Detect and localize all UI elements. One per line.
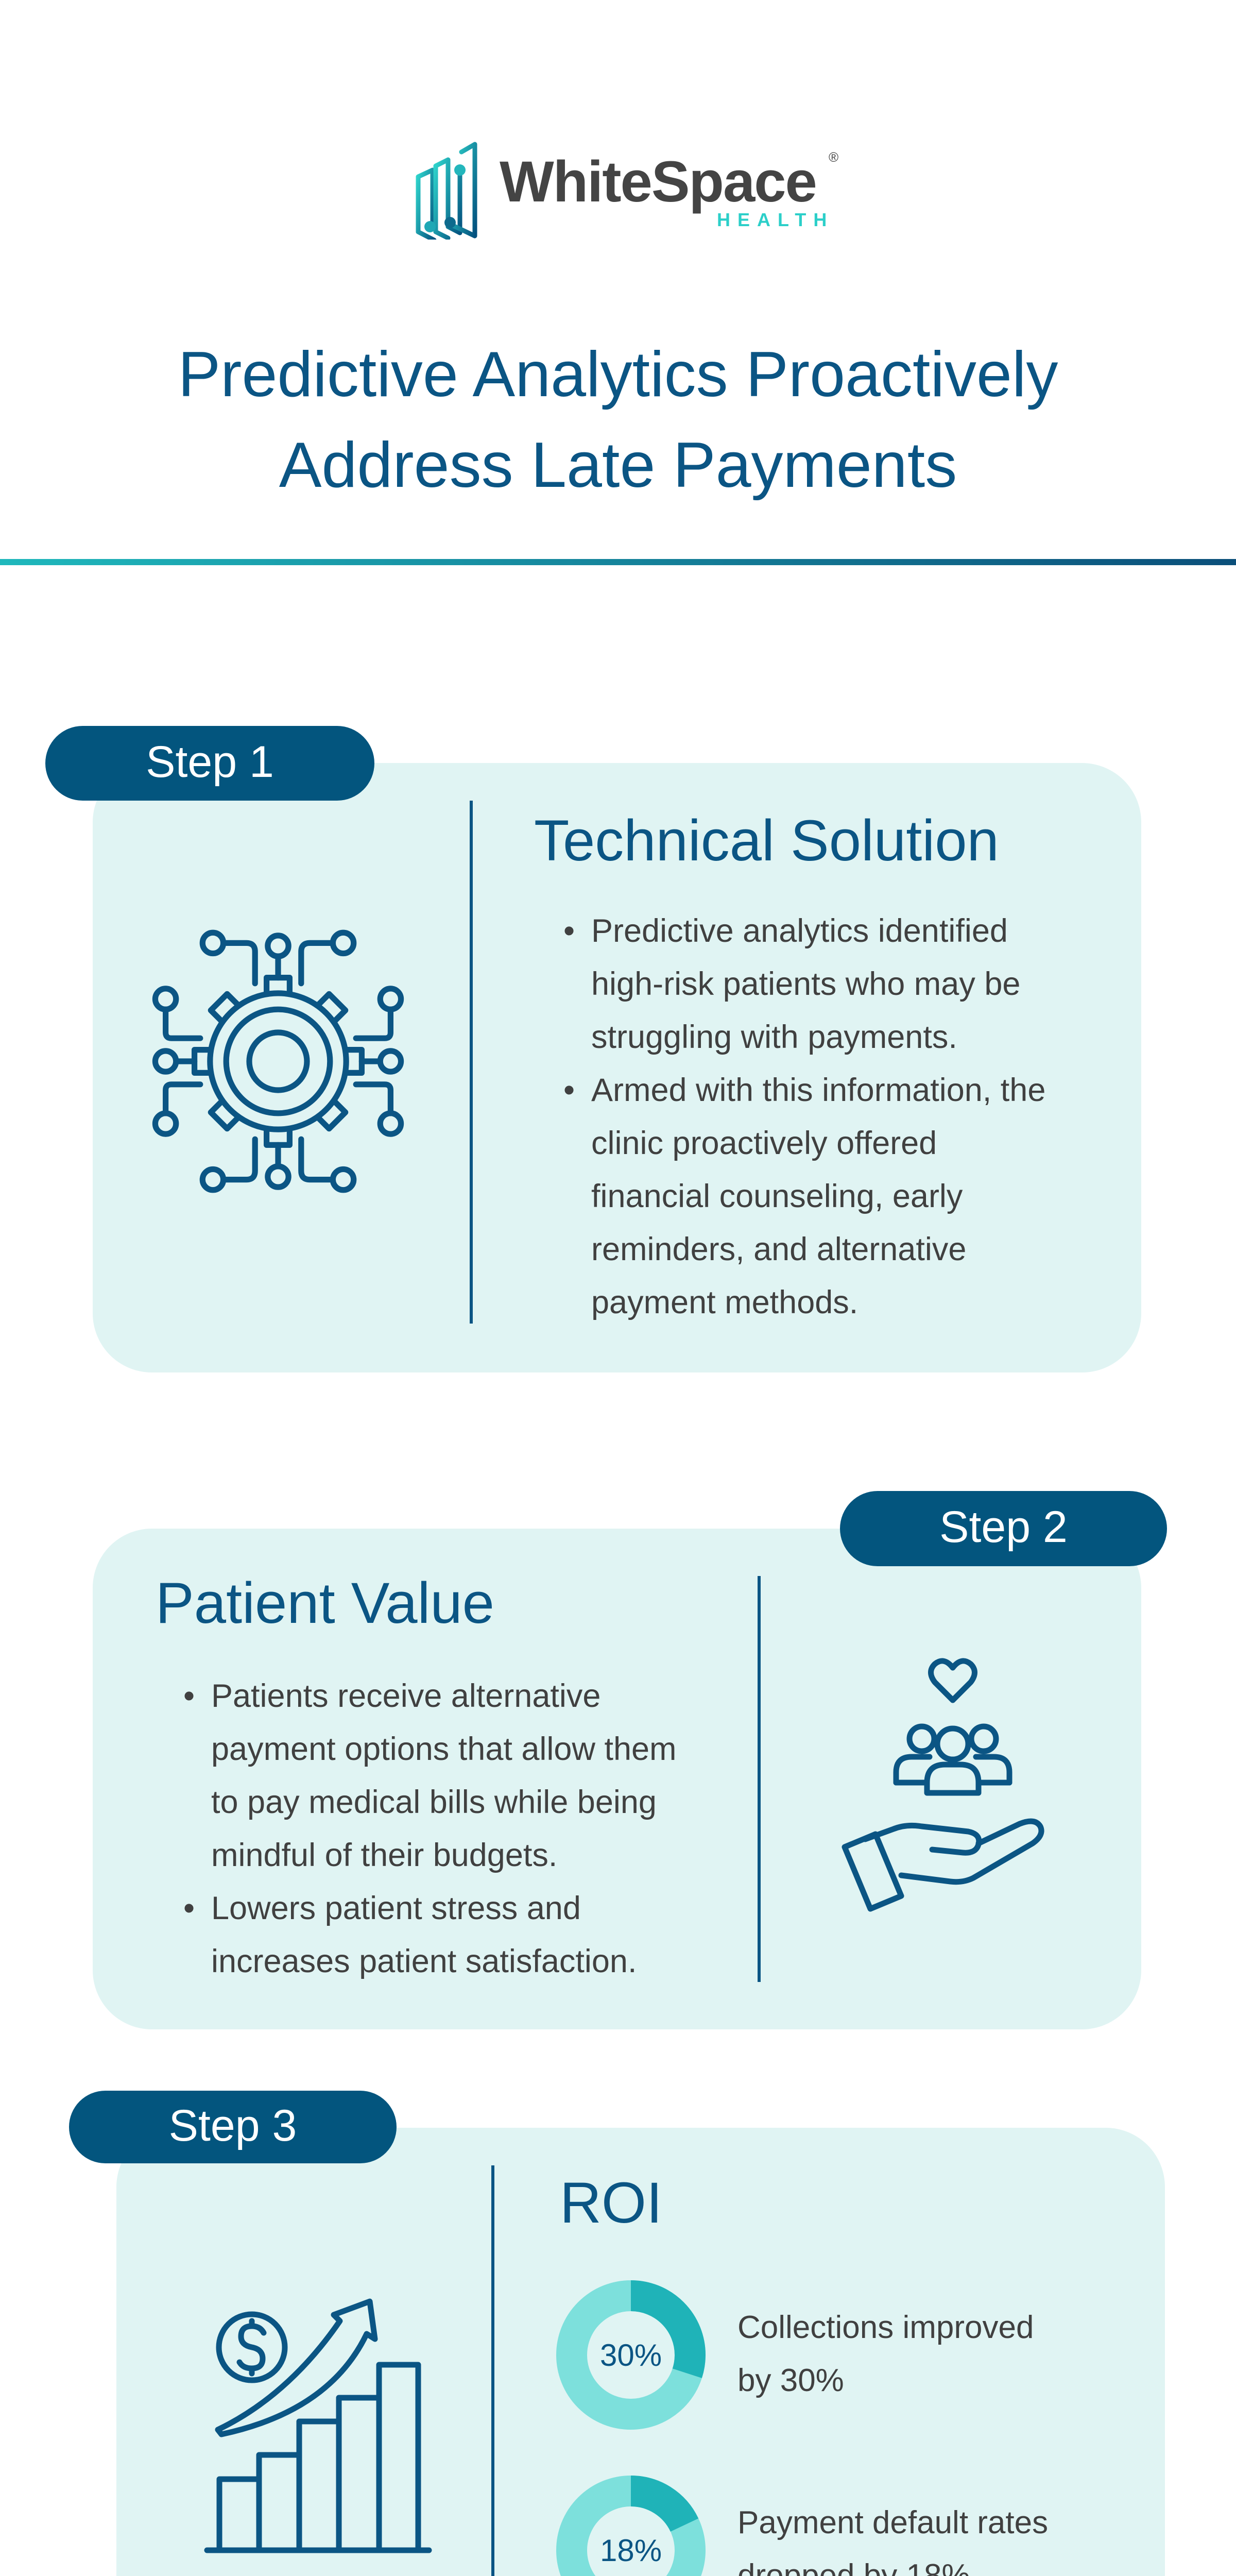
logo wordmark: WhiteSpace	[500, 149, 816, 214]
title: Address Late Payments	[279, 430, 957, 501]
text: •	[563, 1072, 575, 1108]
top gradient divider	[0, 559, 1236, 565]
donut chart: 18%: 18%	[600, 2533, 662, 2568]
bullets: technical solution: financial counseling, early	[591, 1178, 963, 1214]
panel: step 1 technical solution	[93, 763, 1141, 1372]
stat text: collections: by 30%	[737, 2363, 844, 2398]
bullets: patient value: mindful of their budgets.	[211, 1837, 557, 1873]
bullets: patient value: payment options that allow them	[211, 1731, 677, 1767]
stat text: default rates	[737, 2505, 1048, 2576]
step 1 pill: Step 1	[146, 737, 274, 787]
heading: patient value: Patient Value	[156, 1571, 494, 1635]
icon: hand with people and heart	[842, 1658, 1044, 1911]
step 2 pill: Step 2	[939, 1502, 1068, 1552]
bullets: technical solution: Predictive analytics identified	[591, 913, 1008, 949]
bullets: technical solution	[563, 913, 1045, 1320]
bullets: technical solution: struggling with payments.	[591, 1019, 957, 1055]
stat text: collections: Collections improved	[737, 2310, 1034, 2345]
heading: ROI: ROI	[560, 2171, 662, 2235]
step 1 pill	[45, 726, 374, 801]
bullets: patient value: Lowers patient stress and	[211, 1890, 581, 1926]
logo	[416, 142, 838, 240]
bullets: technical solution: payment methods.	[591, 1284, 858, 1320]
donut chart: 30%	[556, 2280, 706, 2430]
text: •	[183, 1678, 195, 1714]
bullets: technical solution: Armed with this information, the	[591, 1072, 1045, 1108]
step 2 pill	[840, 1491, 1167, 1566]
stat text: collections	[737, 2310, 1034, 2398]
text: •	[563, 913, 575, 949]
title: Predictive Analytics Proactively	[178, 339, 1058, 410]
logo: ®	[829, 149, 838, 165]
icon: growth chart with dollar	[204, 2299, 432, 2553]
bullets: technical solution: high-risk patients who may be	[591, 966, 1020, 1002]
logo: HEALTH	[717, 209, 834, 230]
heading: technical solution: Technical Solution	[534, 808, 999, 873]
panel: step 3 ROI	[116, 2128, 1165, 2576]
step 3 pill	[69, 2091, 397, 2163]
bullets: patient value: increases patient satisfaction.	[211, 1943, 637, 1979]
bullets: technical solution: clinic proactively offered	[591, 1125, 937, 1161]
title	[178, 339, 1058, 501]
text: •	[183, 1890, 195, 1926]
bullets: patient value: Patients receive alternative	[211, 1678, 600, 1714]
step 3 pill: Step 3	[169, 2101, 297, 2150]
logo icon	[416, 142, 477, 240]
donut chart: 30%: 30%	[600, 2338, 662, 2372]
bullets: patient value	[183, 1678, 677, 1979]
icon: gear circuit	[152, 929, 404, 1193]
stat text: default rates: Payment default rates	[737, 2505, 1048, 2540]
bullets: technical solution: reminders, and alternative	[591, 1231, 966, 1267]
bullets: patient value: to pay medical bills while being	[211, 1784, 657, 1820]
donut chart: 18%	[556, 2476, 706, 2576]
panel: step 2 patient value	[93, 1529, 1141, 2029]
